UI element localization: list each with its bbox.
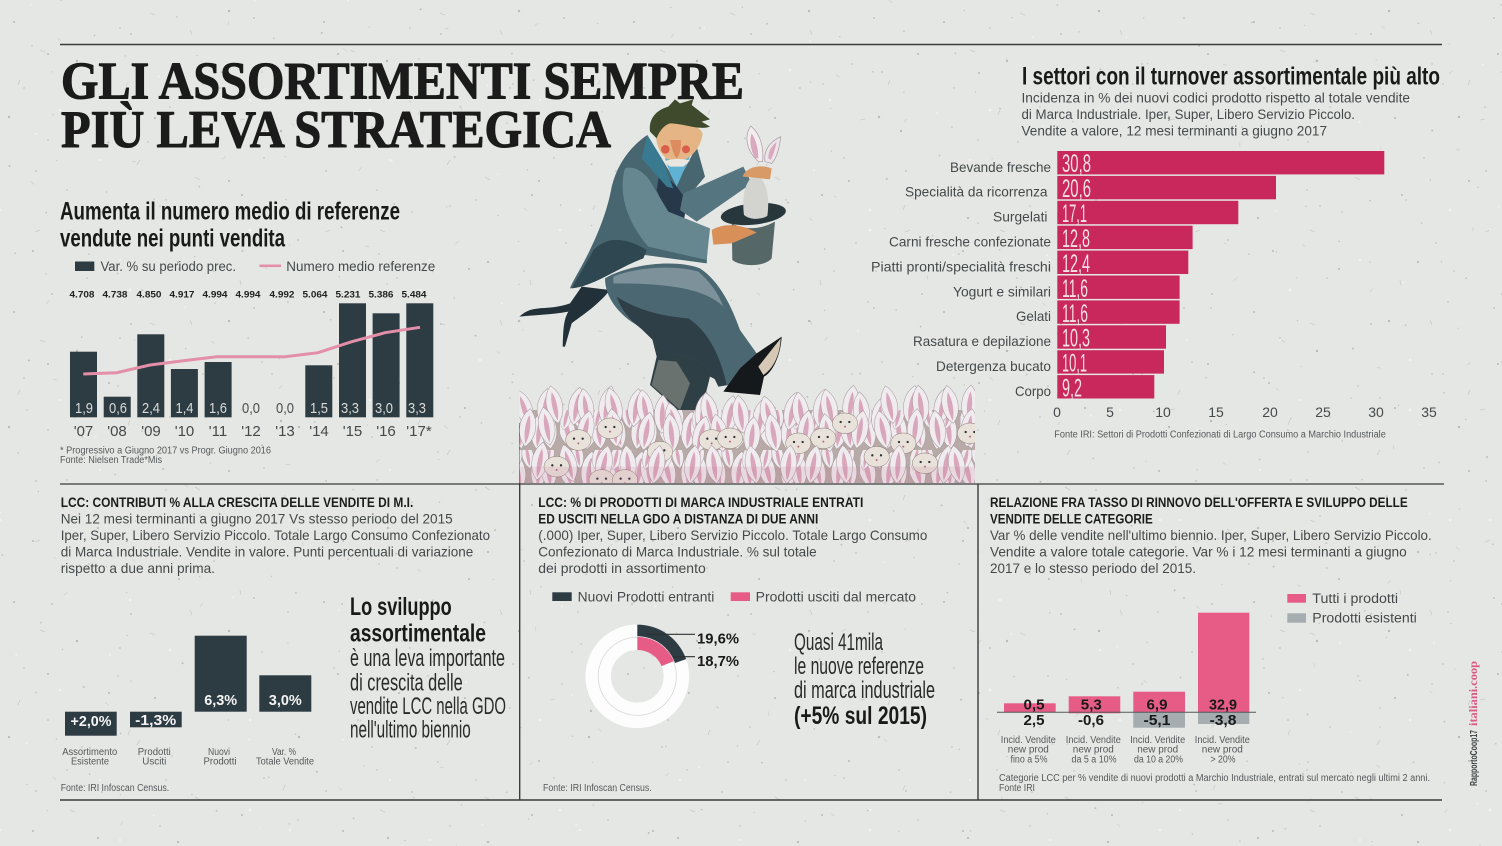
year axis: '13 bbox=[275, 423, 295, 440]
source: Fonte IRI bbox=[999, 783, 1035, 794]
bar chart: 6,9 bbox=[1146, 696, 1168, 714]
bar chart: 3,0% bbox=[269, 692, 302, 709]
bar values bbox=[75, 400, 426, 417]
source: Fonte: IRI Infoscan Census. bbox=[61, 783, 169, 794]
icon: trousers shadow bbox=[617, 297, 727, 387]
source bbox=[999, 773, 1430, 794]
year axis: '12 bbox=[241, 423, 261, 440]
icon: rabbit field bbox=[511, 384, 983, 490]
description: 2017 e lo stesso periodo del 2015. bbox=[990, 560, 1196, 576]
icon: sleeve holding hat bbox=[623, 168, 710, 260]
bar chart bbox=[997, 613, 1256, 729]
bar values: 11,6 bbox=[1062, 300, 1088, 328]
value axis: 35 bbox=[1421, 404, 1437, 420]
heading: Aumenta il numero medio di referenze bbox=[60, 198, 400, 226]
description: Vendite a valore totale categorie. Var % i 12 mesi terminanti a giugno bbox=[990, 544, 1407, 560]
bar values: 3,3 bbox=[408, 400, 426, 417]
panel: tasso di rinnovo bbox=[990, 495, 1432, 794]
icon: hat brim bbox=[720, 200, 787, 228]
panel: settori turnover bbox=[871, 62, 1440, 440]
bar labels bbox=[1001, 735, 1250, 766]
bar labels: Totale Vendite bbox=[256, 756, 314, 768]
icon: coat bbox=[570, 135, 708, 288]
year axis: '14 bbox=[309, 423, 329, 440]
callout: assortimentale bbox=[350, 620, 486, 648]
top values bbox=[70, 290, 426, 300]
callout: nell'ultimo biennio bbox=[350, 717, 471, 744]
bar values: 1,4 bbox=[176, 400, 194, 417]
bar values: 11,6 bbox=[1062, 275, 1088, 303]
bar labels: new prod bbox=[1202, 745, 1243, 756]
bar values: 12,8 bbox=[1062, 225, 1090, 253]
description bbox=[538, 527, 928, 576]
legend bbox=[552, 590, 916, 605]
category labels bbox=[871, 159, 1051, 399]
bar chart: -3,8 bbox=[1210, 712, 1236, 729]
bar labels: da 10 a 20% bbox=[1134, 754, 1183, 766]
bar labels: Incid. Vendite bbox=[1001, 735, 1056, 746]
icon: shirt and tie bbox=[665, 157, 690, 187]
top values: 4.994 bbox=[236, 290, 260, 300]
bar values: 3,0 bbox=[375, 400, 393, 417]
year axis: '10 bbox=[175, 423, 194, 440]
category labels: Carni fresche confezionate bbox=[889, 234, 1051, 250]
category labels: Specialità da ricorrenza bbox=[905, 184, 1048, 200]
legend: Nuovi Prodotti entranti bbox=[578, 590, 714, 605]
description: Confezionato di Marca Industriale. % sul totale bbox=[538, 544, 817, 560]
category labels: Gelati bbox=[1016, 308, 1051, 324]
category labels: Rasatura e depilazione bbox=[913, 333, 1051, 349]
footnote: * Progressivo a Giugno 2017 vs Progr. Giugno 2016 bbox=[60, 446, 271, 456]
bar chart: -1,3% bbox=[135, 712, 176, 729]
bar labels: Var. % bbox=[272, 747, 296, 758]
top values: 5.484 bbox=[402, 290, 426, 300]
bar chart: 32,9 bbox=[1209, 696, 1237, 714]
bar values: 12,4 bbox=[1062, 250, 1090, 278]
bar labels: Prodotti bbox=[138, 747, 171, 758]
bar values: 10,1 bbox=[1062, 350, 1087, 378]
description: Nei 12 mesi terminanti a giugno 2017 Vs stesso periodo del 2015 bbox=[61, 510, 453, 526]
year axis: '08 bbox=[107, 423, 127, 440]
title: GLI ASSORTIMENTI SEMPRE bbox=[61, 52, 744, 110]
heading bbox=[538, 495, 863, 526]
icon: trousers highlight bbox=[613, 268, 723, 307]
bar labels: new prod bbox=[1008, 745, 1049, 756]
callout: Lo sviluppo bbox=[350, 593, 452, 621]
callout: le nuove referenze bbox=[794, 653, 924, 680]
bar values: 17,1 bbox=[1062, 200, 1087, 228]
source: Fonte: IRI Infoscan Census. bbox=[543, 783, 652, 794]
heading: vendute nei punti vendita bbox=[60, 225, 286, 253]
value axis: 15 bbox=[1208, 404, 1224, 420]
bar labels: > 20% bbox=[1210, 754, 1236, 766]
category labels: Piatti pronti/specialità freschi bbox=[871, 258, 1051, 274]
footnote bbox=[60, 446, 271, 466]
icon: coat tails bbox=[519, 287, 610, 347]
legend bbox=[75, 259, 435, 274]
year axis: '07 bbox=[74, 423, 93, 440]
bar values: 0,0 bbox=[276, 400, 294, 417]
source: Categorie LCC per % vendite di nuovi prodotti a Marchio Industriale, entrati sul mercato negli ultimi 2 anni. bbox=[999, 773, 1430, 784]
top values: 4.850 bbox=[136, 290, 162, 300]
top values: 4.738 bbox=[102, 290, 128, 300]
panel: prodotti entrati e usciti bbox=[538, 495, 935, 794]
description: Var % delle vendite nell'ultimo biennio. Iper, Super, Libero Servizio Piccolo. bbox=[990, 527, 1432, 543]
bar labels: fino a 5% bbox=[1010, 754, 1048, 766]
bar chart: 0,5 bbox=[1024, 696, 1044, 714]
heading bbox=[990, 495, 1408, 526]
legend: Numero medio referenze bbox=[286, 259, 435, 274]
bar labels bbox=[62, 747, 314, 768]
vertical credit: RapportoCoop17 bbox=[1468, 730, 1480, 786]
callout: (+5% sul 2015) bbox=[794, 702, 927, 730]
illustration: magician with rabbit and hat over field of rabbits bbox=[511, 99, 983, 490]
value axis: 5 bbox=[1106, 404, 1114, 420]
bar labels: Incid. Vendite bbox=[1195, 735, 1250, 746]
category labels: Surgelati bbox=[993, 208, 1048, 224]
legend: Var. % su periodo prec. bbox=[100, 259, 236, 274]
bar chart: -0,6 bbox=[1078, 712, 1104, 729]
year axis: '17* bbox=[406, 423, 432, 440]
bar values: 0,0 bbox=[242, 400, 260, 417]
legend: Prodotti esistenti bbox=[1312, 610, 1417, 626]
legend: Prodotti usciti dal mercato bbox=[756, 590, 916, 605]
description: Vendite a valore, 12 mesi terminanti a giugno 2017 bbox=[1022, 123, 1327, 139]
legend bbox=[1287, 591, 1417, 626]
icon: coat shading bbox=[572, 240, 647, 288]
heading: VENDITE DELLE CATEGORIE bbox=[990, 511, 1153, 526]
source: Fonte IRI: Settori di Prodotti Confezionati di Largo Consumo a Marchio Industriale bbox=[1054, 430, 1386, 440]
bar labels: Esistente bbox=[71, 756, 109, 768]
description bbox=[1022, 90, 1410, 139]
heading: ED USCITI NELLA GDO A DISTANZA DI DUE ANNI bbox=[538, 511, 818, 526]
icon: shoe bbox=[723, 337, 782, 395]
panel: referenze chart bbox=[60, 198, 435, 466]
title bbox=[61, 52, 744, 159]
bar values: 30,8 bbox=[1062, 150, 1091, 178]
callout: vendite LCC nella GDO bbox=[350, 693, 506, 720]
description: dei prodotti in assortimento bbox=[538, 560, 706, 576]
donut chart: 19,6% bbox=[697, 630, 739, 648]
callout: di crescita delle bbox=[350, 670, 463, 697]
callout: di marca industriale bbox=[794, 677, 935, 704]
bar chart: 2,5 bbox=[1024, 712, 1044, 729]
icon: trousers bbox=[605, 264, 757, 387]
category labels: Bevande fresche bbox=[950, 159, 1051, 175]
bar values: 3,3 bbox=[341, 400, 359, 417]
heading: RELAZIONE FRA TASSO DI RINNOVO DELL'OFFERTA E SVILUPPO DELLE bbox=[990, 495, 1408, 510]
bar values: 9,2 bbox=[1062, 374, 1082, 402]
value axis: 0 bbox=[1053, 404, 1061, 420]
bar values: 1,9 bbox=[75, 400, 93, 417]
icon: raised arm bbox=[680, 167, 752, 222]
icon: vest bbox=[657, 170, 687, 223]
icon: lapel bbox=[642, 135, 673, 188]
bar chart: -5,1 bbox=[1144, 712, 1170, 729]
callout bbox=[350, 593, 506, 744]
donut chart bbox=[598, 625, 739, 715]
year axis bbox=[74, 423, 432, 440]
heading bbox=[60, 198, 400, 253]
value axis: 30 bbox=[1368, 404, 1384, 420]
description: Incidenza in % dei nuovi codici prodotto rispetto al totale vendite bbox=[1022, 90, 1410, 106]
bar labels: Prodotti bbox=[204, 756, 236, 768]
year axis: '16 bbox=[376, 423, 396, 440]
top values: 4.917 bbox=[170, 290, 194, 300]
icon: back leg bbox=[650, 323, 723, 415]
trend line bbox=[83, 327, 420, 374]
category labels: Yogurt e similari bbox=[953, 284, 1051, 300]
value axis: 25 bbox=[1315, 404, 1331, 420]
category labels: Detergenza bucato bbox=[936, 358, 1051, 374]
bar labels: Assortimento bbox=[62, 747, 118, 758]
year axis: '15 bbox=[343, 423, 362, 440]
top values: 4.994 bbox=[202, 290, 228, 300]
bar values: 2,4 bbox=[142, 400, 160, 417]
footnote: Fonte: Nielsen Trade*Mis bbox=[60, 455, 162, 466]
vertical credit: italiani.coop bbox=[1466, 661, 1480, 726]
panel: contributi crescita bbox=[61, 495, 506, 794]
bar labels: Nuovi bbox=[208, 747, 230, 758]
year axis: '11 bbox=[209, 423, 227, 440]
icon: rabbit bbox=[743, 126, 781, 219]
heading: LCC: % DI PRODOTTI DI MARCA INDUSTRIALE ENTRATI bbox=[538, 495, 863, 510]
bar chart bbox=[70, 303, 433, 417]
bar values: 1,5 bbox=[310, 400, 328, 417]
top values: 5.064 bbox=[302, 290, 328, 300]
description bbox=[990, 527, 1432, 576]
bar labels: new prod bbox=[1073, 745, 1114, 756]
callout: Quasi 41mila bbox=[794, 629, 883, 656]
value axis: 20 bbox=[1262, 404, 1278, 420]
description bbox=[61, 510, 490, 576]
description: di Marca Industriale. Iper, Super, Libero Servizio Piccolo. bbox=[1022, 106, 1355, 122]
bar chart bbox=[65, 636, 311, 736]
icon: head bbox=[650, 99, 710, 167]
top values: 5.231 bbox=[336, 290, 360, 300]
bar labels: Incid. Vendite bbox=[1066, 735, 1121, 746]
bar values: 0,6 bbox=[109, 400, 127, 417]
bar chart: 6,3% bbox=[204, 692, 237, 709]
bar chart bbox=[1057, 151, 1384, 398]
legend: Tutti i prodotti bbox=[1312, 591, 1398, 606]
category labels: Corpo bbox=[1015, 383, 1051, 399]
bar values bbox=[1062, 150, 1091, 402]
top values: 5.386 bbox=[368, 290, 394, 300]
heading: LCC: CONTRIBUTI % ALLA CRESCITA DELLE VENDITE DI M.I. bbox=[61, 495, 413, 510]
callout bbox=[794, 629, 935, 730]
value axis bbox=[1053, 404, 1437, 420]
bar values: 20,6 bbox=[1062, 175, 1091, 203]
bar chart: +2,0% bbox=[70, 713, 112, 730]
icon: hand under hat bbox=[712, 225, 757, 245]
top values: 4.992 bbox=[270, 290, 294, 300]
bar values: 1,6 bbox=[209, 400, 227, 417]
year axis: '09 bbox=[141, 423, 161, 440]
description: Iper, Super, Libero Servizio Piccolo. Totale Largo Consumo Confezionato bbox=[61, 527, 490, 543]
bar labels: Incid. Vendite bbox=[1130, 735, 1186, 746]
icon: hat crown bbox=[732, 222, 775, 265]
title: PIÙ LEVA STRATEGICA bbox=[61, 101, 611, 159]
description: di Marca Industriale. Vendite in valore. Punti percentuali di variazione bbox=[61, 544, 473, 560]
bar labels: new prod bbox=[1137, 745, 1178, 756]
description: (.000) Iper, Super, Libero Servizio Piccolo. Totale Largo Consumo bbox=[538, 527, 928, 543]
vertical credit bbox=[1466, 661, 1480, 786]
callout: è una leva importante bbox=[350, 645, 505, 672]
value axis: 10 bbox=[1155, 404, 1171, 420]
bar values: 10,3 bbox=[1062, 324, 1090, 352]
bar labels: da 5 a 10% bbox=[1072, 754, 1117, 766]
top values: 4.708 bbox=[70, 290, 94, 300]
donut chart: 18,7% bbox=[697, 653, 739, 670]
bar chart: 5,3 bbox=[1081, 696, 1102, 714]
icon: boot back bbox=[652, 360, 690, 410]
description: rispetto a due anni prima. bbox=[61, 560, 215, 576]
bar labels: Usciti bbox=[142, 756, 166, 768]
